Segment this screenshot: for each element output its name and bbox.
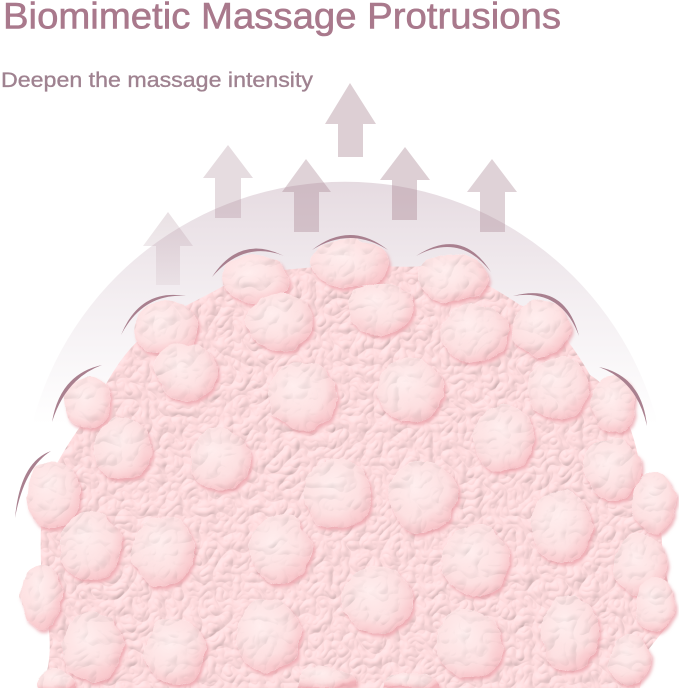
- pressure arcs above protrusions: [15, 235, 647, 518]
- arc 4: [212, 249, 284, 277]
- ball body with pebbled texture: [40, 266, 668, 688]
- arrow: inner right: [380, 147, 430, 220]
- massage ball: [0, 239, 679, 688]
- arc 6: [416, 244, 491, 272]
- protrusions: [22, 239, 676, 688]
- arc 5: [312, 235, 388, 250]
- dome backdrop: [32, 182, 658, 425]
- arrow: right: [467, 159, 517, 232]
- arc 2: [52, 365, 102, 422]
- arrows rising from the ball: [143, 83, 517, 285]
- arrow: inner left: [282, 159, 331, 232]
- arc 7: [513, 293, 579, 336]
- arrow: upper left: [203, 145, 253, 218]
- arrow: centre top: [325, 83, 376, 157]
- arc 3: [121, 295, 186, 335]
- arc 8: [599, 367, 647, 426]
- subtitle: Deepen the massage intensity: [1, 68, 313, 92]
- arrow: far left: [143, 212, 193, 285]
- arc 1: [15, 451, 51, 518]
